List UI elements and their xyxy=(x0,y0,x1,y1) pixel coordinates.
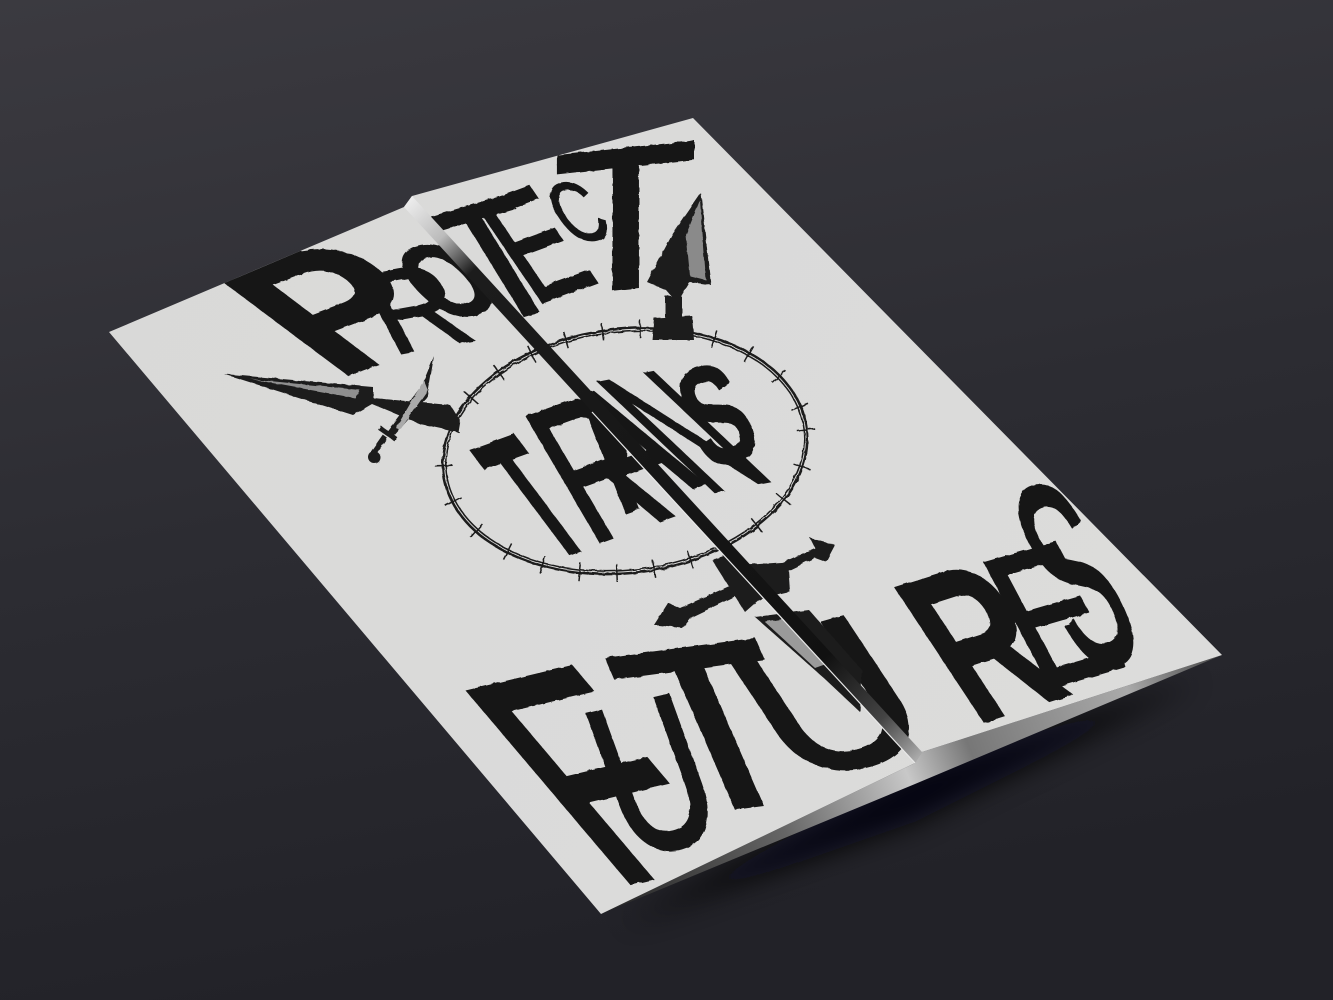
icon: small dagger xyxy=(368,356,434,463)
heading: FUTURES: U xyxy=(682,573,971,824)
heading: PROTECT: C xyxy=(528,162,627,262)
cast shadow xyxy=(620,680,1200,925)
heading: TRANS: N xyxy=(555,337,813,527)
heading: FUTURES: F xyxy=(402,606,791,944)
heading: PROTECT: O xyxy=(364,215,529,345)
icon: lower-left spear xyxy=(224,374,460,432)
heading: PROTECT: T xyxy=(554,100,698,338)
icon: barbed wire ring xyxy=(434,319,816,582)
center fold slit xyxy=(404,196,922,763)
heading: TRANS: S xyxy=(655,330,778,500)
heading: FUTURES: T xyxy=(581,591,848,864)
slit highlight line xyxy=(592,412,915,763)
heading: PROTECT: E xyxy=(449,155,621,335)
heading: FUTURES: R xyxy=(859,518,1103,767)
icon: lower sword with cross guard xyxy=(654,538,862,712)
heading: TRANS xyxy=(444,330,813,596)
heading: FUTURES: S xyxy=(976,428,1174,725)
inner fold wedge xyxy=(601,655,1222,914)
heading: FUTURES xyxy=(466,484,1134,886)
heading: TRANS: R xyxy=(495,350,700,583)
heading: TRANS: A xyxy=(524,348,728,544)
heading: FUTURES: U xyxy=(562,650,747,902)
heading: PROTECT: P xyxy=(169,206,508,410)
paper sheet xyxy=(109,118,1222,914)
heading: PROTECT: R xyxy=(339,240,492,379)
heading: TRANS: T xyxy=(444,401,624,596)
printed artwork xyxy=(224,140,1134,886)
heading: PROTECT: T xyxy=(402,163,595,359)
icon: upper spear xyxy=(647,193,711,340)
heading: PROTECT xyxy=(224,140,695,376)
heading: FUTURES: E xyxy=(954,502,1150,728)
